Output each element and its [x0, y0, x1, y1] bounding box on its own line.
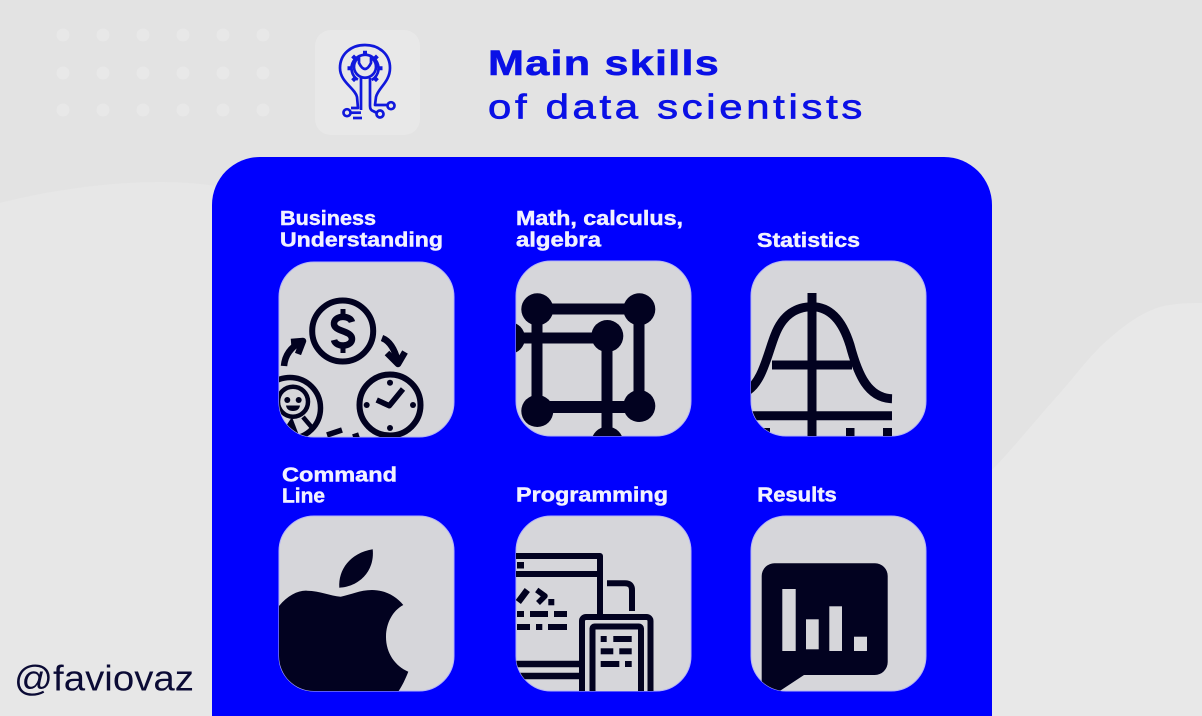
card: results chart bubble icon	[751, 516, 926, 692]
card: programming windows icon	[516, 516, 692, 692]
card: business understanding icon	[278, 262, 454, 438]
heading: Math, calculus, algebra	[516, 208, 683, 252]
heading: Math, calculus, algebra: Math, calculus,	[516, 208, 683, 230]
credit handle: @faviovaz	[14, 658, 194, 699]
heading: Command Line: Command	[282, 465, 397, 487]
heading: Programming: Programming	[516, 485, 668, 507]
heading: Results: Results	[757, 485, 837, 507]
heading: Business Understanding	[280, 208, 443, 252]
heading: Command Line	[282, 465, 397, 508]
icon: light bulb with gear and wrench	[315, 30, 420, 135]
heading: Command Line: Line	[282, 486, 325, 508]
card: math cube graph icon	[516, 260, 692, 436]
title: of data scientists	[488, 88, 866, 126]
heading: Statistics: Statistics	[757, 230, 860, 252]
title: Main skills	[488, 44, 720, 83]
heading: Math, calculus, algebra: algebra	[516, 230, 602, 252]
heading: Business Understanding: Business	[280, 208, 376, 230]
panel: skills	[212, 157, 992, 716]
title	[488, 44, 866, 126]
card: statistics bell curve icon	[745, 261, 926, 438]
heading: Business Understanding: Understanding	[280, 230, 443, 252]
card: apple logo icon	[270, 516, 454, 692]
